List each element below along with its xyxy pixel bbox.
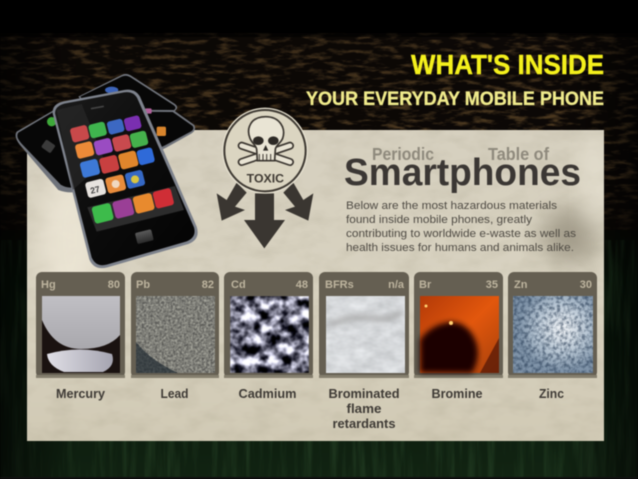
icon: toxic skull badge with arrows: TOXIC [247, 172, 284, 186]
heading: Periodic Table of Smartphones: Periodic [372, 144, 434, 164]
arrows [217, 183, 313, 248]
tile: Bromine: Bromine [432, 386, 482, 401]
tile: Lead: Pb [136, 279, 150, 291]
tile: BFRs: retardants [332, 416, 396, 431]
tile: Mercury [36, 272, 125, 401]
tile: BFRs: Brominated [328, 386, 400, 401]
tile: Lead: Lead [160, 386, 189, 401]
title [306, 49, 604, 110]
tile: Cadmium: Cadmium [238, 386, 296, 401]
tile: Cadmium: Cd [231, 279, 246, 291]
text block: description: contributing to worldwide e-waste as well as [346, 228, 577, 240]
bromine photo [420, 296, 499, 373]
tile: BFRs: n/a [388, 279, 405, 291]
icon: stacked smartphones [16, 74, 198, 268]
flame retardant photo [326, 296, 405, 373]
text block: description: health issues for humans and animals alike. [346, 242, 574, 254]
title: YOUR EVERYDAY MOBILE PHONE [306, 89, 604, 110]
tile: Mercury: Mercury [56, 386, 106, 401]
dock band [87, 186, 184, 232]
tile: Cadmium [224, 272, 313, 401]
app icons: 27 [89, 184, 101, 196]
cadmium photo [230, 296, 309, 373]
tile: Mercury: 80 [108, 279, 120, 291]
back phone left [16, 108, 195, 192]
text block: description: found inside mobile phones, greatly [346, 214, 533, 226]
heading: Periodic Table of Smartphones: Smartphones [344, 152, 581, 194]
tile: BFRs: BFRs [325, 279, 354, 291]
tile: Lead [131, 272, 219, 401]
tile: Zinc: Zn [514, 279, 528, 291]
main phone body [53, 90, 198, 268]
panel: periodic table [27, 130, 605, 441]
tile: Bromine [414, 272, 503, 401]
badge circle [222, 108, 308, 194]
tile: BFRs [319, 272, 409, 431]
tile: Zinc [508, 272, 597, 401]
mercury photo [42, 296, 120, 373]
text block: description [346, 200, 577, 254]
tile: Zinc: 30 [580, 279, 592, 291]
home button [135, 229, 154, 244]
app icons [69, 115, 174, 224]
skull and crossbones [242, 117, 290, 162]
main phone screen [55, 92, 195, 265]
tile: Zinc: Zinc [539, 386, 564, 401]
screen glare [57, 104, 105, 190]
speaker [91, 106, 104, 109]
heading: Periodic Table of Smartphones: Table of [488, 144, 549, 164]
tile: Lead: 82 [202, 279, 214, 291]
title: WHAT'S INSIDE [411, 49, 604, 80]
tile: Cadmium: 48 [296, 279, 308, 291]
tile: Bromine: Br [419, 279, 432, 291]
back phone top [78, 74, 177, 130]
icon: toxic skull badge with arrows [217, 108, 313, 248]
lead photo [136, 296, 215, 373]
tile: BFRs: flame [346, 401, 382, 416]
tile: Bromine: 35 [486, 279, 498, 291]
text block: description: Below are the most hazardous materials [346, 200, 558, 212]
tile: Mercury: Hg [41, 279, 56, 291]
zinc photo [513, 296, 593, 373]
